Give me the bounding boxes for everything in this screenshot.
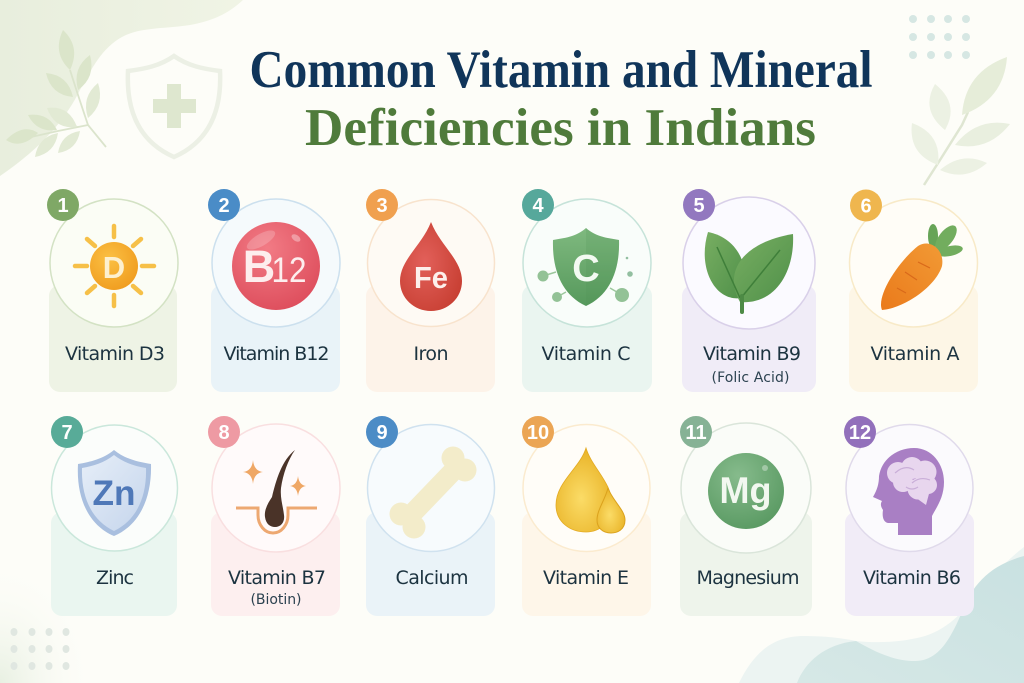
card 10: Vitamin E	[522, 416, 651, 616]
badge 12	[844, 416, 876, 448]
badge 2	[208, 189, 240, 221]
card 3: Iron	[366, 189, 495, 392]
card 6: Vitamin A	[849, 190, 978, 392]
icon: green leaves	[705, 232, 793, 312]
icon: oil drops	[556, 448, 625, 533]
card 7: Zinc	[51, 416, 178, 616]
background glow: bottom left	[0, 560, 95, 683]
sublabel: (Biotin)	[250, 592, 302, 608]
badge 8	[208, 416, 240, 448]
icon: health shield	[128, 56, 220, 157]
badge 4: 4	[532, 195, 544, 217]
badge 6: 6	[860, 196, 872, 218]
badge 7: 7	[61, 422, 73, 444]
icon: B12 capsule: B	[243, 241, 275, 292]
card 11: Magnesium	[680, 416, 812, 616]
icon: C shield with molecules: C	[572, 248, 600, 290]
icon: sun: D	[103, 250, 125, 285]
label: Vitamin B12	[224, 343, 330, 365]
badge 1: 1	[57, 195, 69, 217]
badge 11: 11	[685, 422, 707, 444]
decorative branch: top left	[6, 30, 106, 157]
icon: Fe blood drop	[400, 222, 462, 311]
badge 5: 5	[693, 195, 705, 217]
card 8: Vitamin B7	[208, 416, 340, 616]
badge 5	[683, 189, 715, 221]
label: Vitamin E	[543, 567, 629, 589]
badge 8: 8	[218, 422, 230, 444]
badge 12: 12	[849, 422, 871, 444]
background blob: bottom right teal	[797, 556, 1024, 683]
icon: head with brain	[873, 448, 944, 535]
badge 10: 10	[527, 422, 549, 444]
background blob: bottom right pale	[739, 547, 1024, 683]
icon: carrot	[881, 222, 964, 310]
label: Calcium	[396, 567, 468, 589]
title: Common Vitamin and Mineral	[250, 41, 872, 99]
badge 9: 9	[376, 422, 388, 444]
icon: Mg sphere: Mg	[720, 470, 772, 511]
background blob: top left	[0, 0, 243, 176]
icon: hair follicle	[236, 450, 317, 533]
label: Iron	[414, 343, 448, 365]
label: Vitamin D3	[65, 343, 165, 365]
label: Vitamin A	[870, 343, 960, 365]
card 9: Calcium	[366, 416, 495, 616]
label: Vitamin B6	[863, 567, 961, 589]
dot grid: bottom left	[10, 628, 70, 670]
badge 7	[51, 416, 83, 448]
icon: bone	[390, 446, 476, 538]
sublabel: (Folic Acid)	[712, 370, 790, 386]
title: Deficiencies in Indians	[305, 99, 816, 157]
label: Vitamin B9	[703, 343, 801, 365]
icon: Zn shield	[78, 450, 151, 536]
decorative branch: top right	[912, 57, 1010, 185]
badge 3: 3	[376, 195, 388, 217]
icon: Mg sphere	[708, 453, 784, 529]
badge 1	[47, 189, 79, 221]
card 4: Vitamin C	[522, 189, 652, 392]
badge 11	[680, 416, 712, 448]
badge 6	[850, 190, 882, 222]
title	[250, 41, 872, 157]
icon: Fe blood drop: Fe	[414, 260, 448, 295]
card 5: Vitamin B9	[682, 189, 816, 392]
label: Vitamin B7	[228, 567, 326, 589]
badge 4	[522, 189, 554, 221]
card 12: Vitamin B6	[844, 416, 974, 616]
card 1: Vitamin D3	[47, 189, 178, 392]
card 2: Vitamin B12	[208, 189, 340, 392]
icon: sun	[75, 226, 154, 306]
badge 9	[366, 416, 398, 448]
icon: B12 capsule: 12	[272, 251, 306, 290]
dot grid: top right	[909, 15, 970, 59]
icon: C shield with molecules	[538, 228, 633, 306]
icon: B12 capsule	[232, 222, 320, 310]
badge 2: 2	[218, 195, 230, 217]
label: Zinc	[96, 567, 134, 589]
badge 3	[366, 189, 398, 221]
badge 10	[522, 416, 554, 448]
label: Magnesium	[696, 567, 800, 589]
icon: Zn shield: Zn	[92, 474, 136, 513]
label: Vitamin C	[542, 343, 630, 365]
